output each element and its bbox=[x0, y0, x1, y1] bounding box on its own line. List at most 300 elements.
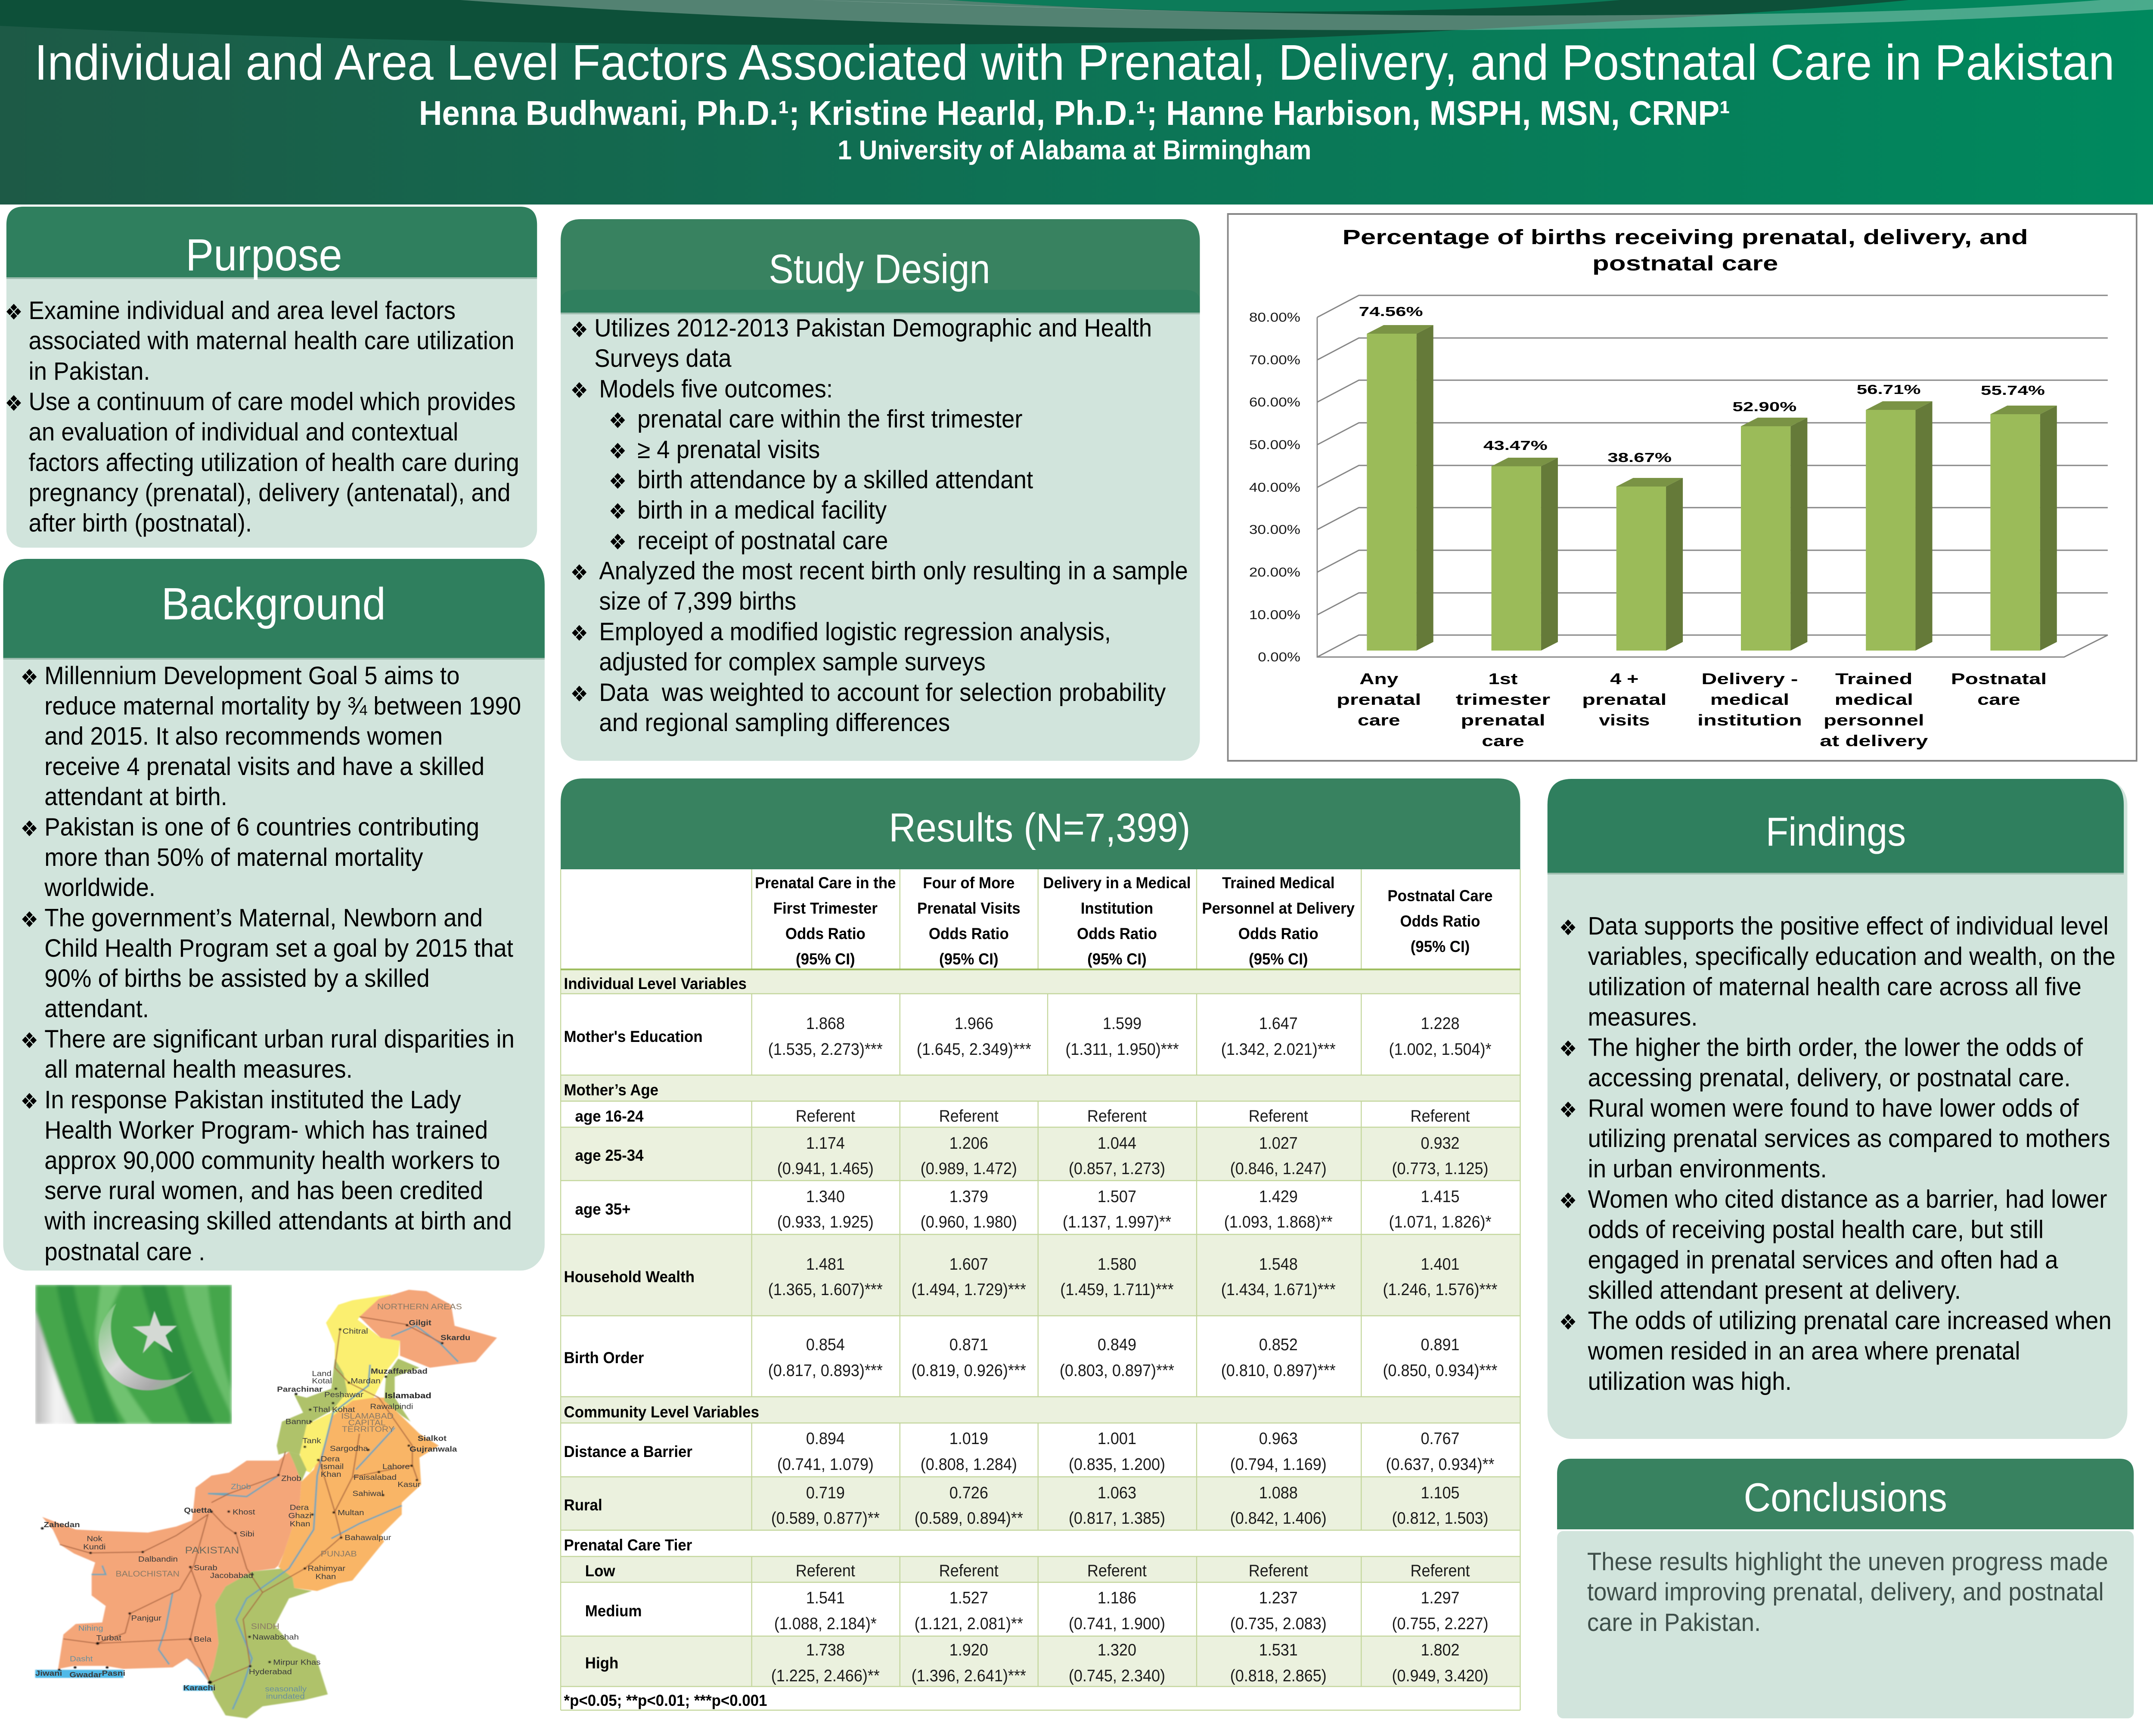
y axis labels: 60.00% bbox=[1249, 395, 1300, 409]
panel: purpose bbox=[5, 207, 537, 548]
table row: rural: 1.088 bbox=[1259, 1483, 1298, 1502]
y axis labels: 80.00% bbox=[1249, 310, 1300, 325]
table row: mother's education: 1.647 bbox=[1259, 1014, 1298, 1032]
findings text: utilization of maternal health care across all five bbox=[1588, 973, 2082, 1001]
table row: tier low bbox=[796, 1561, 1470, 1580]
map: place labels: Pasni bbox=[102, 1669, 125, 1678]
table column headers: First Trimester bbox=[773, 899, 878, 917]
table row: tier medium: (0.735, 2.083) bbox=[1230, 1614, 1327, 1633]
findings text: Data supports the positive effect of individual level bbox=[1588, 912, 2109, 940]
x axis labels: prenatal bbox=[1337, 691, 1421, 708]
table row: rural: 0.726 bbox=[949, 1483, 988, 1502]
map: place labels: Thal bbox=[313, 1406, 330, 1414]
purpose text: Examine individual and area level factors bbox=[28, 297, 456, 325]
table row: tier medium: (1.088, 2.184)* bbox=[774, 1614, 877, 1633]
table row: tier medium: 1.541 bbox=[806, 1588, 845, 1607]
x axis labels: 4 + bbox=[1610, 671, 1638, 688]
map: place labels: Gilgit bbox=[409, 1319, 431, 1327]
table row: age 25-34: (0.773, 1.125) bbox=[1392, 1159, 1489, 1178]
table row: age 35+: (1.071, 1.826)* bbox=[1389, 1212, 1492, 1231]
map: kashmir bbox=[384, 1359, 419, 1422]
map: place labels: Kohat bbox=[332, 1406, 355, 1414]
table row: distance a barrier: (0.794, 1.169) bbox=[1230, 1455, 1327, 1473]
table row: age 16-24 bbox=[796, 1107, 1470, 1125]
table row: distance a barrier: 0.963 bbox=[1259, 1429, 1298, 1448]
findings text: The higher the birth order, the lower the odds of bbox=[1588, 1034, 2083, 1062]
table row: tier medium: 1.186 bbox=[1098, 1588, 1136, 1607]
table row: household wealth: (1.494, 1.729)*** bbox=[912, 1280, 1026, 1299]
map: place labels: PUNJAB bbox=[321, 1550, 357, 1559]
table column headers: Delivery in a Medical bbox=[1043, 874, 1191, 892]
map: place labels: Sargodha bbox=[330, 1445, 368, 1453]
y axis labels: 40.00% bbox=[1249, 480, 1300, 495]
map: place labels: Parachinar bbox=[277, 1386, 323, 1394]
table row: household wealth: (1.434, 1.671)*** bbox=[1221, 1280, 1336, 1299]
map: place labels: Dera bbox=[290, 1504, 309, 1512]
panel: background bbox=[3, 559, 545, 1271]
table row: age 35+: 1.429 bbox=[1259, 1187, 1298, 1206]
table row: household wealth: 1.401 bbox=[1421, 1255, 1460, 1273]
table row: mother's education: (1.535, 2.273)*** bbox=[768, 1040, 883, 1058]
table row: distance a barrier: (0.637, 0.934)** bbox=[1386, 1455, 1495, 1473]
map: place labels: seasonally bbox=[265, 1685, 307, 1693]
heading: study design: Study Design bbox=[769, 246, 990, 292]
table row: rural bbox=[771, 1483, 1489, 1527]
table row: age 35+: (1.093, 1.868)** bbox=[1224, 1212, 1333, 1231]
table row: distance a barrier bbox=[777, 1429, 1495, 1473]
table row: tier medium: (1.121, 2.081)** bbox=[915, 1614, 1023, 1633]
study design text: Surveys data bbox=[594, 344, 732, 372]
bar: trained medical personnel 56.71%: 56.71% bbox=[1857, 382, 1921, 397]
bar: delivery medical institution 52.90% bbox=[1732, 400, 1807, 651]
table column headers: (95% CI) bbox=[939, 950, 999, 968]
table row labels: Community Level Variables bbox=[564, 1403, 759, 1421]
map: place labels: Jacobabad bbox=[210, 1572, 253, 1580]
table row labels: Birth Order bbox=[564, 1348, 644, 1367]
study design text: ❖ bbox=[609, 499, 627, 524]
chart title: Percentage of births receiving prenatal, delivery, and bbox=[1343, 226, 2028, 248]
x axis labels: trimester bbox=[1456, 691, 1550, 708]
heading: purpose: Purpose bbox=[186, 230, 342, 280]
map: place labels: Bannu bbox=[285, 1418, 311, 1426]
conclusions text bbox=[1587, 1548, 2108, 1637]
map: place labels: inundated bbox=[266, 1693, 305, 1701]
x axis labels: at delivery bbox=[1820, 733, 1928, 750]
table row: age 25-34: 0.932 bbox=[1421, 1134, 1460, 1152]
table row: age 16-24: Referent bbox=[796, 1107, 855, 1125]
heading: conclusions: Conclusions bbox=[1743, 1475, 1947, 1520]
background text: ❖ bbox=[20, 665, 38, 690]
map: place labels: Khost bbox=[233, 1508, 255, 1516]
x axis labels bbox=[1337, 671, 2047, 750]
bar: postnatal care 55.74%: 55.74% bbox=[1981, 383, 2045, 398]
background text: postnatal care . bbox=[44, 1238, 205, 1266]
table row labels: Rural bbox=[564, 1496, 602, 1514]
background text: reduce maternal mortality by ¾ between 1990 bbox=[44, 692, 521, 720]
background text: The government’s Maternal, Newborn and bbox=[44, 904, 483, 932]
bar: 4+ prenatal visits 38.67% bbox=[1607, 450, 1683, 651]
map: place labels: Chitral bbox=[343, 1327, 368, 1336]
table row: birth order: 0.871 bbox=[949, 1335, 988, 1354]
y axis labels: 10.00% bbox=[1249, 608, 1300, 622]
bar: 1st trimester prenatal care 43.47%: 43.47% bbox=[1483, 438, 1548, 453]
background text: and 2015. It also recommends women bbox=[44, 722, 443, 750]
x axis labels: visits bbox=[1599, 712, 1650, 729]
table row: mother's education: (1.645, 2.349)*** bbox=[917, 1040, 1031, 1058]
panel: conclusions bbox=[1557, 1459, 2134, 1718]
affiliation: 1 University of Alabama at Birmingham bbox=[838, 135, 1311, 165]
study design text: Employed a modified logistic regression analysis, bbox=[599, 618, 1111, 646]
map: place labels: BALOCHISTAN bbox=[115, 1570, 180, 1578]
table column headers: (95% CI) bbox=[1411, 937, 1470, 955]
map: place labels: Mardan bbox=[351, 1377, 381, 1385]
table row: tier low: Referent bbox=[796, 1561, 855, 1580]
table row: age 35+: (1.137, 1.997)** bbox=[1063, 1212, 1171, 1231]
table column headers: Odds Ratio bbox=[1400, 912, 1480, 930]
map: place labels: Zhob bbox=[281, 1475, 301, 1483]
x axis labels: prenatal bbox=[1461, 712, 1545, 729]
heading: background: Background bbox=[161, 579, 386, 629]
table row: birth order bbox=[768, 1335, 1498, 1380]
table column headers: Postnatal Care bbox=[1387, 887, 1493, 905]
flag crescent bbox=[99, 1303, 193, 1390]
table row labels: *p<0.05; **p<0.01; ***p<0.001 bbox=[564, 1691, 767, 1709]
table row: tier high: (1.396, 2.641)*** bbox=[912, 1666, 1026, 1685]
map: place labels: Gujranwala bbox=[410, 1445, 457, 1454]
map: place labels: Tank bbox=[302, 1437, 321, 1445]
study design text: ❖ bbox=[609, 469, 627, 494]
table row: household wealth: (1.459, 1.711)*** bbox=[1060, 1280, 1174, 1299]
bar: trained medical personnel 56.71% bbox=[1857, 382, 1933, 651]
findings text: ❖ bbox=[1559, 1188, 1577, 1213]
background text: receive 4 prenatal visits and have a skilled bbox=[44, 753, 484, 781]
study design text: ❖ bbox=[570, 621, 588, 646]
table row: rural: 1.105 bbox=[1421, 1483, 1460, 1502]
table row: birth order: 0.852 bbox=[1259, 1335, 1298, 1354]
purpose text: Use a continuum of care model which provides bbox=[28, 388, 516, 416]
table row: age 35+: 1.379 bbox=[949, 1187, 988, 1206]
findings text: women resided in an area where prenatal bbox=[1588, 1337, 2020, 1365]
study design text: ❖ bbox=[570, 378, 588, 403]
purpose text: in Pakistan. bbox=[28, 357, 150, 385]
map: place labels: Islamabad bbox=[385, 1391, 431, 1400]
map: place labels: Nawabshah bbox=[252, 1633, 299, 1641]
map: place labels: Multan bbox=[338, 1509, 364, 1517]
y axis labels: 70.00% bbox=[1249, 353, 1300, 367]
background text: In response Pakistan instituted the Lady bbox=[44, 1086, 461, 1114]
table row: tier medium: 1.297 bbox=[1421, 1588, 1460, 1607]
findings text: accessing prenatal, delivery, or postnatal care. bbox=[1588, 1064, 2071, 1092]
table row: age 25-34: 1.206 bbox=[949, 1134, 988, 1152]
table row: distance a barrier: 1.019 bbox=[949, 1429, 988, 1448]
table row: tier high: 1.531 bbox=[1259, 1640, 1298, 1659]
table column headers: Trained Medical bbox=[1222, 874, 1335, 892]
study design text: ❖ bbox=[609, 439, 627, 464]
table column headers: Odds Ratio bbox=[1077, 924, 1157, 942]
table row: distance a barrier: 0.894 bbox=[806, 1429, 845, 1448]
flag star bbox=[133, 1311, 177, 1353]
table row: age 35+: 1.340 bbox=[806, 1187, 845, 1206]
table row labels: High bbox=[585, 1654, 618, 1672]
panel: findings bbox=[1548, 779, 2127, 1439]
study design text: ❖ bbox=[570, 317, 588, 342]
table row: tier high: 1.738 bbox=[806, 1640, 845, 1659]
x axis labels: prenatal bbox=[1582, 691, 1666, 708]
table row: tier high: 1.920 bbox=[949, 1640, 988, 1659]
map: place labels: Peshawar bbox=[324, 1391, 363, 1399]
conclusions text: These results highlight the uneven progress made bbox=[1587, 1548, 2108, 1576]
background text: Millennium Development Goal 5 aims to bbox=[44, 662, 459, 690]
map: place labels: Bahawalpur bbox=[344, 1534, 391, 1542]
findings text: engaged in prenatal services and often had a bbox=[1588, 1246, 2058, 1274]
table row: household wealth: (1.365, 1.607)*** bbox=[768, 1280, 883, 1299]
heading: results: Results (N=7,399) bbox=[889, 806, 1191, 850]
study design text: ❖ bbox=[609, 530, 627, 555]
conclusions text: toward improving prenatal, delivery, and postnatal bbox=[1587, 1578, 2104, 1606]
bar: any prenatal care 74.56% bbox=[1359, 304, 1433, 651]
table row labels: Mother’s Age bbox=[564, 1081, 658, 1099]
background text: ❖ bbox=[20, 907, 38, 932]
study design text: Data was weighted to account for selection probability bbox=[599, 679, 1166, 707]
table row: age 25-34: 1.044 bbox=[1098, 1134, 1136, 1152]
table row: household wealth: (1.246, 1.576)*** bbox=[1383, 1280, 1498, 1299]
map: rivers bbox=[92, 1326, 458, 1709]
map: place labels: Dalbandin bbox=[138, 1555, 178, 1564]
table column headers: Prenatal Visits bbox=[917, 899, 1021, 917]
table row: household wealth: 1.580 bbox=[1098, 1255, 1136, 1273]
purpose text: ❖ bbox=[5, 391, 23, 416]
background text: There are significant urban rural disparities in bbox=[44, 1025, 515, 1053]
study design text: Analyzed the most recent birth only resulting in a sample bbox=[599, 557, 1188, 585]
map: place labels: Khan bbox=[290, 1520, 310, 1528]
table row: distance a barrier: 1.001 bbox=[1098, 1429, 1136, 1448]
map: city dots bbox=[41, 1324, 444, 1684]
map: place labels: Sahiwal bbox=[352, 1490, 383, 1498]
table row: rural: (0.817, 1.385) bbox=[1069, 1509, 1165, 1527]
table column headers: (95% CI) bbox=[796, 950, 855, 968]
table row: household wealth: 1.481 bbox=[806, 1255, 845, 1273]
table column headers: Prenatal Care in the bbox=[755, 874, 896, 892]
table row: age 25-34: 1.174 bbox=[806, 1134, 845, 1152]
map: place labels: Turbat bbox=[96, 1634, 122, 1643]
purpose text: ❖ bbox=[5, 300, 23, 325]
map: punjab bbox=[279, 1398, 439, 1591]
map of pakistan bbox=[35, 1290, 497, 1718]
table row: mother's education: 1.228 bbox=[1421, 1014, 1460, 1032]
study design text: size of 7,399 births bbox=[599, 587, 796, 615]
title: Individual and Area Level Factors Associated with Prenatal, Delivery, and Postnatal Care in Pakistan bbox=[34, 34, 2115, 90]
purpose text: factors affecting utilization of health care during bbox=[28, 449, 519, 477]
study design text: Models five outcomes: bbox=[599, 375, 833, 403]
findings text: odds of receiving postal health care, but still bbox=[1588, 1216, 2044, 1244]
purpose text: associated with maternal health care utilization bbox=[28, 327, 515, 355]
table row: mother's education bbox=[768, 1014, 1492, 1058]
table row: birth order: (0.803, 0.897)*** bbox=[1060, 1361, 1174, 1380]
table row labels: Individual Level Variables bbox=[564, 974, 747, 992]
table row: birth order: (0.810, 0.897)*** bbox=[1221, 1361, 1336, 1380]
map: balochistan bbox=[42, 1452, 301, 1681]
map: place labels: Khan bbox=[316, 1573, 336, 1581]
table row labels: age 16-24 bbox=[575, 1107, 644, 1125]
table row labels: Prenatal Care Tier bbox=[564, 1536, 692, 1554]
map: place labels: Land bbox=[312, 1370, 332, 1378]
table row: tier medium: 1.237 bbox=[1259, 1588, 1298, 1607]
table row: age 16-24: Referent bbox=[1087, 1107, 1147, 1125]
map: tribal areas bbox=[276, 1359, 347, 1454]
map: place labels: TERRITORY bbox=[342, 1425, 394, 1434]
table row: birth order: (0.819, 0.926)*** bbox=[912, 1361, 1026, 1380]
findings text: Rural women were found to have lower odds of bbox=[1588, 1094, 2079, 1122]
panel: study design bbox=[561, 219, 1200, 761]
background text: Child Health Program set a goal by 2015 that bbox=[44, 934, 513, 962]
purpose text: pregnancy (prenatal), delivery (antenatal), and bbox=[28, 479, 510, 507]
map: place labels: Skardu bbox=[441, 1334, 470, 1342]
findings text: ❖ bbox=[1559, 1310, 1577, 1335]
table row: tier medium: (0.741, 1.900) bbox=[1069, 1614, 1165, 1633]
table column headers: Odds Ratio bbox=[929, 924, 1009, 942]
background text: all maternal health measures. bbox=[44, 1055, 353, 1083]
table row: rural: (0.589, 0.894)** bbox=[915, 1509, 1023, 1527]
findings text: measures. bbox=[1588, 1003, 1697, 1031]
chart title bbox=[1343, 226, 2028, 275]
findings text: utilizing prenatal services as compared to mothers bbox=[1588, 1125, 2110, 1153]
table row: mother's education: 1.966 bbox=[955, 1014, 993, 1032]
table column headers: Odds Ratio bbox=[1238, 924, 1318, 942]
findings text: The odds of utilizing prenatal care increased when bbox=[1588, 1307, 2112, 1335]
study design text: ❖ bbox=[570, 682, 588, 707]
table row: household wealth: 1.548 bbox=[1259, 1255, 1298, 1273]
table row: age 35+: (0.933, 1.925) bbox=[777, 1212, 874, 1231]
study design text: adjusted for complex sample surveys bbox=[599, 648, 986, 676]
map: place labels: Gwadar bbox=[69, 1671, 102, 1679]
table row: tier low: Referent bbox=[1249, 1561, 1308, 1580]
map: place labels: NORTHERN AREAS bbox=[377, 1302, 462, 1311]
study design text: ≥ 4 prenatal visits bbox=[637, 436, 820, 464]
table row labels bbox=[564, 974, 767, 1709]
table row: tier high: (0.818, 2.865) bbox=[1230, 1666, 1327, 1685]
table row: age 25-34: (0.941, 1.465) bbox=[777, 1159, 874, 1178]
y axis labels: 30.00% bbox=[1249, 523, 1300, 537]
table row: age 25-34 bbox=[777, 1134, 1489, 1178]
map: place labels: Rawalpindi bbox=[370, 1403, 413, 1411]
map: place labels: Rahimyar bbox=[308, 1565, 345, 1573]
table row labels: Distance a Barrier bbox=[564, 1442, 692, 1460]
table row labels: Household Wealth bbox=[564, 1268, 695, 1286]
findings text: ❖ bbox=[1559, 1036, 1577, 1061]
table row: distance a barrier: 0.767 bbox=[1421, 1429, 1460, 1448]
x axis labels: care bbox=[1977, 691, 2020, 708]
table row labels: age 35+ bbox=[575, 1200, 630, 1218]
map: place labels: Karachi bbox=[183, 1684, 216, 1693]
table row shading bbox=[561, 969, 1520, 1686]
background text: Health Worker Program- which has trained bbox=[44, 1116, 488, 1144]
x axis labels: institution bbox=[1697, 712, 1802, 729]
background text bbox=[20, 662, 521, 1266]
study design text bbox=[570, 314, 1188, 737]
background text: ❖ bbox=[20, 1028, 38, 1053]
study design text: birth attendance by a skilled attendant bbox=[637, 466, 1033, 494]
table row: age 16-24: Referent bbox=[1410, 1107, 1470, 1125]
panel: results bbox=[561, 778, 1520, 1710]
study design text: birth in a medical facility bbox=[637, 496, 887, 524]
map: place labels: Jiwani bbox=[35, 1669, 62, 1678]
table row: birth order: 0.891 bbox=[1421, 1335, 1460, 1354]
purpose text: after birth (postnatal). bbox=[28, 509, 252, 537]
table row: age 25-34: (0.846, 1.247) bbox=[1230, 1159, 1327, 1178]
purpose text: an evaluation of individual and contextual bbox=[28, 418, 458, 446]
map: place labels: Ismail bbox=[321, 1463, 344, 1471]
findings text: ❖ bbox=[1559, 1097, 1577, 1122]
table row: tier medium: (0.755, 2.227) bbox=[1392, 1614, 1489, 1633]
map: sindh bbox=[208, 1569, 328, 1718]
study design text: ❖ bbox=[609, 408, 627, 433]
table column headers: Four of More bbox=[923, 874, 1014, 892]
table row labels: Medium bbox=[585, 1602, 642, 1620]
background text: with increasing skilled attendants at birth and bbox=[44, 1207, 512, 1235]
map: place labels: SINDH bbox=[251, 1622, 279, 1631]
table row labels: Mother's Education bbox=[564, 1027, 703, 1045]
map: place labels: Surab bbox=[194, 1564, 217, 1572]
map: place labels: Kasur bbox=[397, 1481, 421, 1489]
x axis labels: medical bbox=[1710, 691, 1789, 708]
table row: tier high: (0.949, 3.420) bbox=[1392, 1666, 1489, 1685]
study design text: ❖ bbox=[570, 560, 588, 585]
findings text: ❖ bbox=[1559, 915, 1577, 940]
x axis labels: Postnatal bbox=[1951, 671, 2047, 688]
table row: mother's education: 1.599 bbox=[1103, 1014, 1142, 1032]
study design text: Utilizes 2012-2013 Pakistan Demographic and Health bbox=[594, 314, 1152, 342]
findings text: variables, specifically education and wealth, on the bbox=[1588, 942, 2116, 970]
map: place labels bbox=[35, 1302, 470, 1701]
study design text: prenatal care within the first trimester bbox=[637, 405, 1023, 433]
map: place labels: Mirpur Khas bbox=[273, 1658, 321, 1667]
table grid bbox=[561, 869, 1520, 1710]
table row: household wealth: 1.607 bbox=[949, 1255, 988, 1273]
table column headers: Institution bbox=[1081, 899, 1153, 917]
map: place labels: Sibi bbox=[240, 1530, 254, 1538]
findings text: skilled attendant present at delivery. bbox=[1588, 1277, 1961, 1305]
table row: rural: (0.842, 1.406) bbox=[1230, 1509, 1327, 1527]
table row: birth order: (0.850, 0.934)*** bbox=[1383, 1361, 1498, 1380]
table row: rural: (0.812, 1.503) bbox=[1392, 1509, 1489, 1527]
table row: tier high: (0.745, 2.340) bbox=[1069, 1666, 1165, 1685]
background text: serve rural women, and has been credited bbox=[44, 1177, 483, 1205]
table column headers: Odds Ratio bbox=[785, 924, 866, 942]
table row: tier low: Referent bbox=[1087, 1561, 1147, 1580]
table row: birth order: 0.849 bbox=[1098, 1335, 1136, 1354]
header banner bbox=[0, 0, 2153, 205]
map: coast water bbox=[35, 1670, 123, 1678]
background text: 90% of births be assisted by a skilled bbox=[44, 964, 430, 992]
bar: postnatal care 55.74% bbox=[1981, 383, 2057, 651]
map: place labels: Kotal bbox=[312, 1377, 332, 1385]
heading: findings: Findings bbox=[1766, 809, 1906, 855]
study design text: and regional sampling differences bbox=[599, 709, 950, 737]
map: place labels: Nok bbox=[87, 1535, 102, 1543]
x axis labels: medical bbox=[1835, 691, 1913, 708]
x axis labels: Delivery - bbox=[1701, 671, 1798, 688]
map: place labels: Quetta bbox=[184, 1507, 212, 1515]
map: roads bbox=[60, 1317, 442, 1682]
findings text: utilization was high. bbox=[1588, 1367, 1792, 1395]
purpose text bbox=[5, 297, 519, 537]
table row: tier high: 1.320 bbox=[1098, 1640, 1136, 1659]
x axis labels: care bbox=[1482, 733, 1524, 750]
x axis labels: Any bbox=[1359, 671, 1399, 688]
table row: mother's education: (1.311, 1.950)*** bbox=[1065, 1040, 1179, 1058]
bar: 4+ prenatal visits 38.67%: 38.67% bbox=[1607, 450, 1672, 465]
table row: tier low: Referent bbox=[1410, 1561, 1470, 1580]
